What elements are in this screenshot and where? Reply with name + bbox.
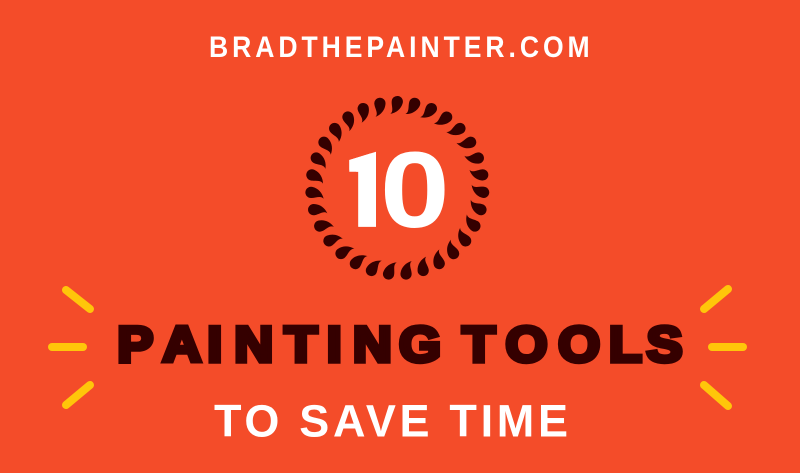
number 10: 0 (380, 129, 450, 250)
number 10 (349, 152, 445, 228)
subtitle: TO SAVE TIME (214, 396, 568, 446)
icon: right emphasis rays (704, 289, 743, 406)
infographic canvas (48, 36, 747, 437)
icon: ring of paint drops (305, 96, 490, 280)
icon: left emphasis rays (52, 290, 90, 405)
number 10: 1 (331, 129, 391, 250)
main title: PAINTING TOOLS (117, 318, 682, 373)
site name heading: BRADTHEPAINTER.COM (209, 31, 590, 63)
badge: number 10 in ring of drops (305, 96, 490, 280)
